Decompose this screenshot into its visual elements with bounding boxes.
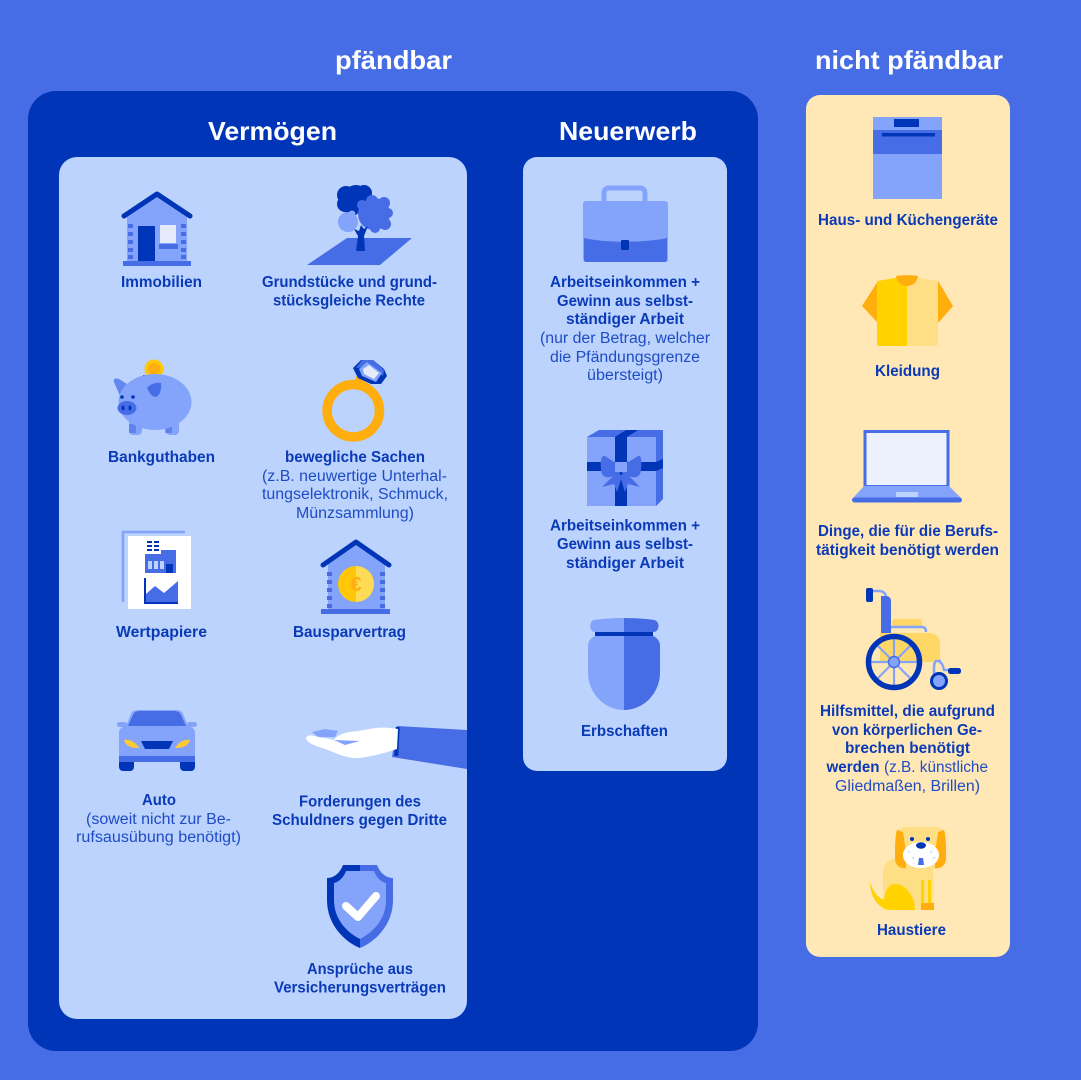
label: Hilfsmittel <box>820 703 995 795</box>
label: Arbeitseinkommen: Gewinn aus selbst- <box>557 536 693 553</box>
icon: ring <box>327 360 387 437</box>
label: Grundstücke: stücksgleiche Rechte <box>273 292 425 310</box>
label: Arbeitseinkommen note: die Pfändungsgrenze <box>550 349 700 366</box>
label: Hilfsmittel: brechen benötigt <box>845 740 970 757</box>
label: Hilfsmittel: (z.B. künstliche <box>884 759 988 776</box>
icon: tree on land <box>307 185 412 265</box>
label: Hilfsmittel: Gliedmaßen, Brillen) <box>835 778 980 795</box>
icon: briefcase <box>583 188 668 262</box>
label: Forderungen: Schuldners gegen Dritte <box>272 812 447 829</box>
label: Arbeitseinkommen: Arbeitseinkommen + <box>550 518 700 534</box>
icon: wheelchair <box>866 588 961 688</box>
label: Hilfsmittel: Hilfsmittel, die aufgrund <box>820 703 995 720</box>
label: Dinge: tätigkeit benötigt werden <box>816 542 999 559</box>
icon: securities document <box>123 532 191 609</box>
label: Grundstücke <box>262 274 437 310</box>
label: Arbeitseinkommen note: Gewinn aus selbst- <box>557 293 693 310</box>
heading: nicht pfändbar: nicht pfändbar <box>815 45 1003 75</box>
icon: laptop <box>852 432 962 502</box>
label: Ansprüche: Ansprüche aus <box>307 961 413 978</box>
icon: piggy bank <box>114 360 192 435</box>
label: Arbeitseinkommen note <box>540 274 710 384</box>
label: Dinge <box>816 523 999 559</box>
panel: Neuerwerb <box>523 157 727 771</box>
panel: pfändbar <box>28 91 758 1051</box>
icon: car <box>117 710 197 771</box>
icon: house <box>123 194 191 266</box>
label: Haus- und Küchengeräte: Haus- und Küchengeräte <box>818 212 998 229</box>
icon: gift <box>587 430 663 506</box>
heading: Vermögen: Vermögen <box>208 116 337 146</box>
label: bewegliche Sachen: (z.B. neuwertige Unterhal- <box>262 468 447 485</box>
label: Wertpapiere: Wertpapiere <box>116 624 207 641</box>
label: Arbeitseinkommen note: übersteigt) <box>587 367 663 384</box>
icon: house with coin <box>321 542 390 614</box>
heading: Neuerwerb: Neuerwerb <box>559 116 697 146</box>
label: Kleidung: Kleidung <box>875 363 940 380</box>
label: Bankguthaben: Bankguthaben <box>108 449 215 466</box>
heading: pfändbar: pfändbar <box>335 45 452 75</box>
label: Arbeitseinkommen note: ständiger Arbeit <box>566 311 684 328</box>
label: Arbeitseinkommen: ständiger Arbeit <box>566 555 684 572</box>
label: Auto <box>76 792 241 846</box>
icon: shirt <box>862 275 953 346</box>
label: Dinge: Dinge, die für die Berufs- <box>818 523 998 540</box>
icon: shield with check <box>327 865 393 948</box>
label: Auto: (soweit nicht zur Be- <box>86 811 231 828</box>
label: Hilfsmittel: von körperlichen Ge- <box>832 722 982 739</box>
label: Haustiere: Haustiere <box>877 922 946 939</box>
label: Forderungen <box>272 794 447 829</box>
label: Arbeitseinkommen <box>550 518 700 572</box>
label: bewegliche Sachen <box>262 449 448 522</box>
label: Forderungen: Forderungen des <box>299 794 421 810</box>
icon: urn <box>588 618 660 710</box>
label: Ansprüche: Versicherungsverträgen <box>274 980 446 996</box>
label: bewegliche Sachen: Münzsammlung) <box>296 505 414 522</box>
label: Erbschaften: Erbschaften <box>581 723 668 740</box>
icon: house with coin: € <box>350 574 362 596</box>
label: Auto: Auto <box>142 792 176 809</box>
label: Ansprüche <box>274 961 446 996</box>
panel: nicht pfändbar <box>806 95 1010 957</box>
label: Immobilien: Immobilien <box>121 274 202 291</box>
label: Grundstücke: Grundstücke und grund- <box>262 274 437 291</box>
panel: Vermögen <box>59 157 467 1019</box>
icon: open hand <box>306 726 467 769</box>
label: Arbeitseinkommen note: Arbeitseinkommen + <box>550 274 700 291</box>
label: bewegliche Sachen: bewegliche Sachen <box>285 449 425 466</box>
label: Hilfsmittel: werden <box>826 759 880 776</box>
label: bewegliche Sachen: tungselektronik, Schmuck, <box>262 486 448 503</box>
label: Auto: rufsausübung benötigt) <box>76 829 241 846</box>
icon: dog <box>870 827 946 910</box>
icon: dishwasher <box>873 117 942 199</box>
label: Arbeitseinkommen note: (nur der Betrag, welcher <box>540 330 710 347</box>
label: Bausparvertrag: Bausparvertrag <box>293 624 406 641</box>
